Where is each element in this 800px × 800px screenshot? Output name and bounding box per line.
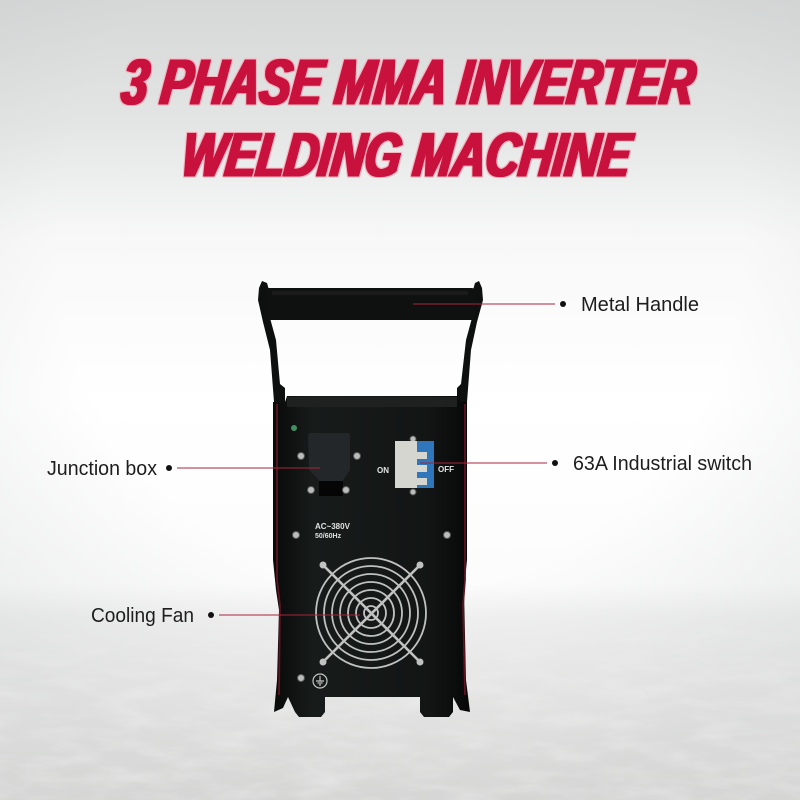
welding machine xyxy=(258,281,483,717)
ground symbol xyxy=(313,674,327,688)
metal handle xyxy=(258,281,483,402)
panel screws xyxy=(292,436,450,682)
junction box xyxy=(308,433,350,496)
callout: junction box xyxy=(47,458,320,480)
callout: 63A industrial switch xyxy=(420,453,752,475)
callout: metal handle: Metal Handle xyxy=(581,294,699,316)
cooling fan xyxy=(316,558,426,668)
callout: junction box: Junction box xyxy=(47,458,157,480)
switch labels xyxy=(377,465,454,475)
top panel shade xyxy=(287,397,457,407)
callout: cooling fan: Cooling Fan xyxy=(91,605,194,627)
callout: cooling fan xyxy=(91,605,360,627)
power indicator led xyxy=(291,425,297,431)
voltage label: 50/60Hz xyxy=(315,533,342,540)
switch labels: ON xyxy=(377,466,389,475)
title xyxy=(118,46,699,190)
switch labels: OFF xyxy=(438,465,454,474)
callout: 63A industrial switch: 63A Industrial switch xyxy=(573,453,752,475)
voltage label xyxy=(315,522,351,540)
title: WELDING MACHINE xyxy=(178,121,637,190)
machine body xyxy=(273,396,470,717)
voltage label: AC~380V xyxy=(315,522,351,531)
63A breaker switch xyxy=(395,441,434,488)
callout: metal handle xyxy=(413,294,699,316)
red side edges xyxy=(277,404,465,695)
